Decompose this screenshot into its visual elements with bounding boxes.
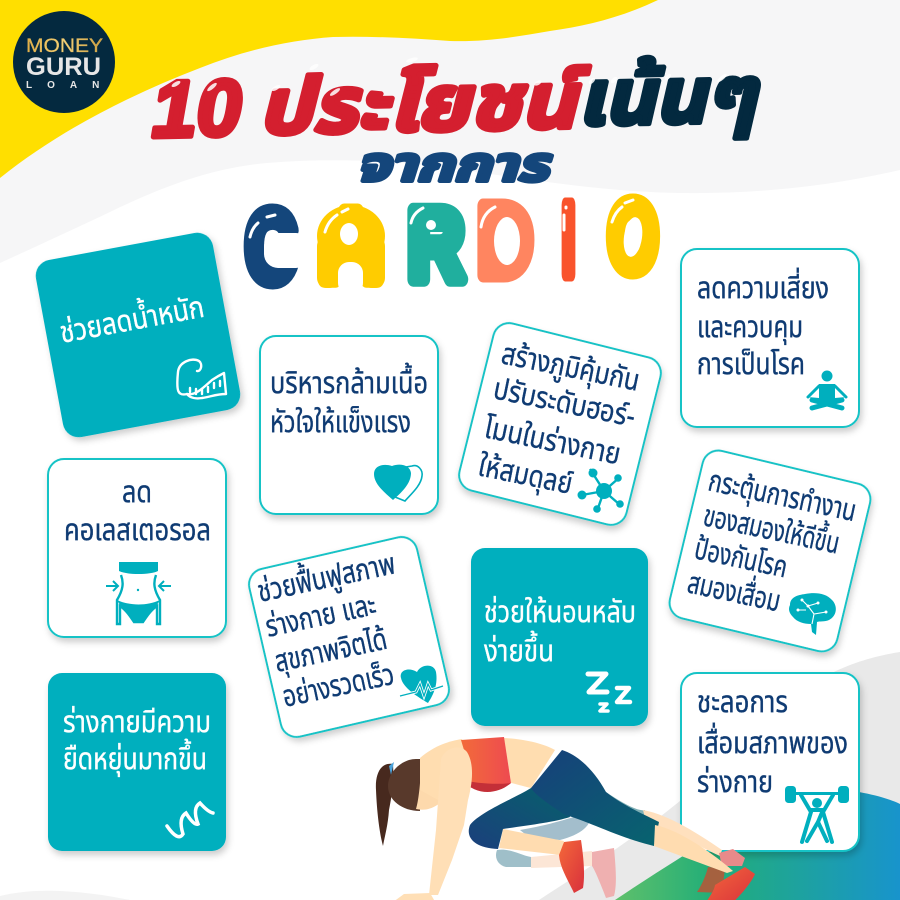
icon: heart pulse xyxy=(400,666,443,703)
panel: สร้างภูมิคุ้มกัน: โมนในร่างกาย xyxy=(482,412,623,471)
panel: ร่างกายมีความยืดหยุ่นมากขึ้น: ยืดหยุ่นมากขึ้น xyxy=(63,738,207,777)
background: green and blue hill xyxy=(615,790,900,900)
back and torso xyxy=(420,739,470,800)
front thigh xyxy=(469,788,570,849)
title: 10 ประโยชน์เน้นๆ xyxy=(150,50,761,154)
panel: บริหารกล้ามเนื้อหัวใจให้แข็งแรง: บริหารกล้ามเนื้อ xyxy=(270,362,428,400)
faded back leg motion xyxy=(496,850,531,867)
panel: ลดความเสี่ยงและควบคุมการเป็นโรค: และควบคุม xyxy=(697,311,803,345)
panel: ชะลอการเสื่อมสภาพของร่างกาย: ชะลอการ xyxy=(697,686,788,719)
panel: ช่วยฟื้นฟูสภาพ: ช่วยฟื้นฟูสภาพ xyxy=(254,543,399,610)
panel: ลด คอเลสเตอรอล: ลด xyxy=(122,476,152,509)
background: grey hill bottom right xyxy=(539,652,900,900)
background: yellow corner xyxy=(0,0,658,178)
heading: CARDIO balloon letters: A xyxy=(322,190,380,302)
icon: waist xyxy=(106,562,171,624)
logo: Money Guru Loan: LOAN xyxy=(26,80,114,91)
heading: CARDIO balloon letters xyxy=(246,181,658,303)
panel: ช่วยฟื้นฟูสภาพ: อย่างรวดเร็ว xyxy=(280,658,397,714)
panel: กระตุ้นการทำงานของสมอง xyxy=(666,447,874,655)
panel: บริหารกล้ามเนื้อหัวใจให้แข็งแรง: หัวใจให้แข็งแรง xyxy=(270,406,411,439)
heading: CARDIO balloon letters: D xyxy=(478,185,532,297)
panel: สร้างภูมิคุ้มกัน: สร้างภูมิคุ้มกัน xyxy=(498,338,642,399)
panel: สร้างภูมิคุ้มกัน: ให้สมดุลย์ xyxy=(475,450,575,502)
logo: Money Guru Loan: MONEY xyxy=(26,36,103,57)
arm xyxy=(429,747,472,895)
title: 10 ประโยชน์เน้นๆ: 10 xyxy=(150,63,242,154)
panel: กระตุ้นการทำงานของสมอง: สมองเสื่อม xyxy=(685,562,784,618)
icon: brain xyxy=(789,593,836,635)
top xyxy=(461,737,511,791)
hair ponytail xyxy=(376,764,393,846)
panel: ชะลอการเสื่อมสภาพของร่างกาย: ร่างกาย xyxy=(697,766,773,799)
background: grey mound bottom left xyxy=(0,891,130,900)
heading: CARDIO balloon letters: R xyxy=(408,189,464,301)
title: 10 ประโยชน์เน้นๆ: ประโยชน์ xyxy=(257,56,592,151)
title: 10 ประโยชน์เน้นๆ: เน้นๆ xyxy=(577,50,761,142)
panel: กระตุ้นการทำงานของสมอง: ของสมองให้ดีขึ้น xyxy=(701,495,843,561)
panel: สร้างภูมิคุ้มกัน xyxy=(456,320,664,528)
icon: two hearts xyxy=(374,465,422,501)
illustration: woman doing mountain climbers xyxy=(376,737,755,900)
heading: CARDIO balloon letters: C xyxy=(246,191,296,303)
hand xyxy=(389,893,437,900)
panel: ร่างกายมีความยืดหยุ่นมากขึ้น xyxy=(48,673,226,851)
panel: ช่วยฟื้นฟูสภาพ: ร่างกาย และ xyxy=(263,588,379,644)
panel: ชะลอการเสื่อมสภาพของร่างกาย: เสื่อมสภาพของ xyxy=(697,722,848,760)
panel: ช่วยให้นอนหลับง่ายขึ้น: ง่ายขึ้น xyxy=(484,630,554,668)
back leg legging xyxy=(531,750,659,846)
panel: สร้างภูมิคุ้มกัน: ปรับระดับฮอร์- xyxy=(491,373,638,434)
panel: ชะลอการเสื่อมสภาพของร่างกาย xyxy=(681,673,859,851)
logo: Money Guru Loan xyxy=(13,11,115,113)
panel: ลด คอเลสเตอรอล: คอเลสเตอรอล xyxy=(64,514,211,547)
panel: กระตุ้นการทำงานของสมอง: ป้องกันโรค xyxy=(692,533,790,584)
heading: CARDIO balloon letters: I xyxy=(562,184,575,296)
icon: weight lifter xyxy=(785,786,849,842)
panel: ช่วยให้นอนหลับง่ายขึ้น xyxy=(471,548,648,726)
panel: ลดความเสี่ยงและควบคุมการเป็นโรค xyxy=(681,249,859,427)
icon: meditation xyxy=(808,370,846,408)
logo: Money Guru Loan: GURU xyxy=(26,53,101,81)
panel: ลด คอเลสเตอรอล xyxy=(48,459,226,637)
icon: Zzz xyxy=(588,674,630,711)
front leg calf xyxy=(499,829,564,855)
subtitle: จากการ: จากการ xyxy=(356,139,552,192)
panel: ช่วยลดน้ำหนัก xyxy=(33,230,243,440)
background: light grey swoosh xyxy=(0,0,900,263)
heading: CARDIO balloon letters: O xyxy=(608,181,658,293)
panel: ช่วยลดน้ำหนัก: ช่วยลดน้ำหนัก xyxy=(56,286,207,350)
front shoe xyxy=(559,840,584,893)
icon: measuring tape xyxy=(177,360,226,398)
panel: ลดความเสี่ยงและควบคุมการเป็นโรค: การเป็นโรค xyxy=(697,348,805,381)
back calf xyxy=(654,825,733,873)
back shoe xyxy=(704,867,755,900)
panel: ร่างกายมีความยืดหยุ่นมากขึ้น: ร่างกายมีความ xyxy=(63,706,211,739)
panel: ลดความเสี่ยงและควบคุมการเป็นโรค: ลดความเสี่ยง xyxy=(697,267,829,305)
head xyxy=(388,759,420,811)
panel: ช่วยให้นอนหลับง่ายขึ้น: ช่วยให้นอนหลับ xyxy=(484,596,636,629)
icon: molecule xyxy=(578,468,624,513)
panel: ช่วยฟื้นฟูสภาพ: สุขภาพจิตได้ xyxy=(272,623,390,680)
panel: ช่วยฟื้นฟูสภาพ xyxy=(246,534,452,740)
icon: stretch waves xyxy=(167,803,213,837)
panel: บริหารกล้ามเนื้อหัวใจให้แข็งแรง xyxy=(260,336,438,514)
